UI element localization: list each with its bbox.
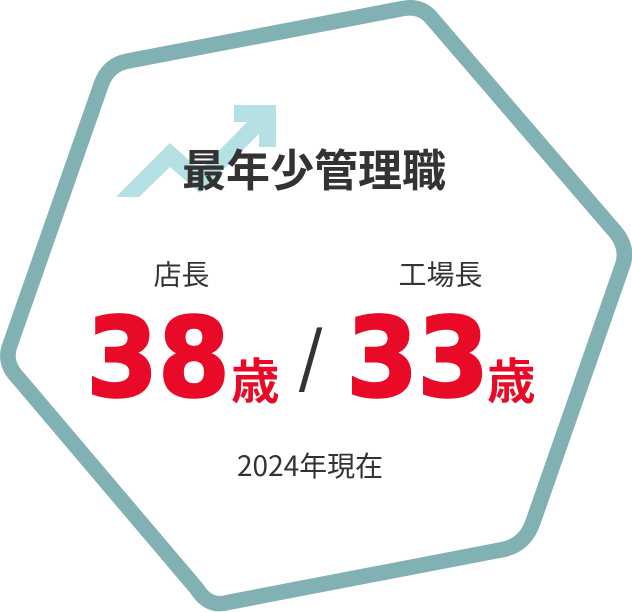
label: store manager: 店長 (154, 254, 210, 294)
value: factory manager age: 3 (346, 295, 418, 423)
value: store manager age: 3 (86, 295, 158, 423)
date note: 2024年現在 (237, 445, 383, 485)
value: factory manager age: 3 (417, 295, 489, 423)
icon: rising arrow (116, 105, 276, 197)
label: factory manager: 工場長 (398, 254, 483, 294)
value: store manager age (86, 295, 280, 423)
slash divider: / (298, 304, 324, 400)
value: factory manager age: 歳 (487, 342, 536, 412)
value: store manager age: 8 (158, 295, 230, 423)
value: store manager age: 歳 (231, 342, 280, 412)
value: factory manager age (346, 295, 536, 423)
title: 最年少管理職 (182, 135, 446, 199)
